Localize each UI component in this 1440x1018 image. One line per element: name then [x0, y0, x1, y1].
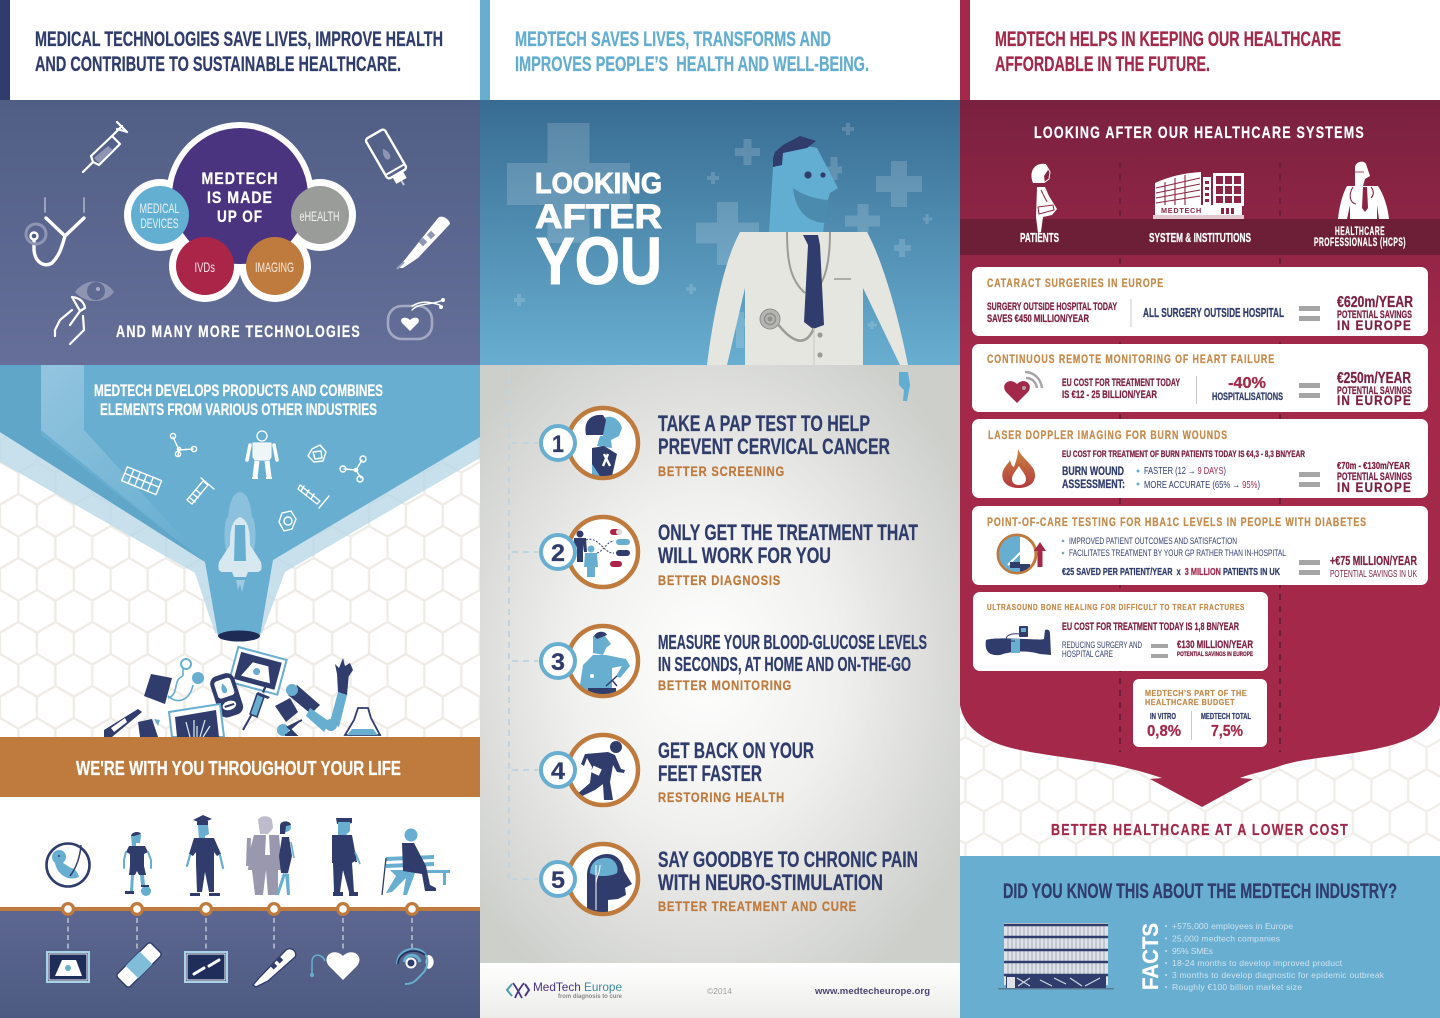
- text: copyright: ©2014: [707, 987, 733, 996]
- card: laser doppler imaging: ASSESSMENT:: [1062, 479, 1125, 491]
- title: looking after you: AFTER: [535, 198, 662, 236]
- number 1: [541, 426, 575, 460]
- card: cataract surgeries: ALL SURGERY OUTSIDE HOSPITAL: [1143, 306, 1284, 320]
- icon: broken bone x-ray: [185, 952, 227, 982]
- card: healthcare budget: MEDTECH’S PART OF THE: [1145, 688, 1247, 698]
- card: ultrasound bone healing: €130 MILLION/YEAR: [1177, 639, 1253, 651]
- figure: graduate: [187, 815, 223, 896]
- header: column 3: [960, 0, 1341, 100]
- text: step 5: BETTER TREATMENT AND CURE: [658, 899, 857, 914]
- number 3: 3: [551, 649, 565, 676]
- banner: with you throughout your life: [0, 737, 480, 797]
- card: ultrasound bone healing: ULTRASOUND BONE HEALING FOR DIFFICULT TO TREAT FRACTURES: [987, 603, 1245, 612]
- icon: heart with lead: [310, 952, 359, 980]
- logo: medtech europe: [507, 980, 623, 1000]
- card: remote monitoring: -40%: [1228, 375, 1266, 392]
- funnel mouth: [218, 630, 260, 642]
- card: cataract surgeries: [972, 267, 1428, 336]
- icon: prosthetic arm: [286, 658, 353, 732]
- icon: heart with signal: [1004, 372, 1042, 403]
- icon: thermometer: [104, 709, 142, 737]
- figure: couple: [248, 816, 294, 895]
- text: step 3: IN SECONDS, AT HOME AND ON-THE-GO: [658, 654, 911, 676]
- icon: thermometer: [253, 949, 296, 987]
- text: hcps: [1314, 226, 1406, 249]
- list: facts: 3 months to develop diagnostic for epidemic outbreak: [1172, 970, 1385, 980]
- text: step 1: BETTER SCREENING: [658, 464, 785, 479]
- band: [960, 219, 1440, 255]
- icon: doctor: [1338, 162, 1389, 219]
- text: better healthcare at lower cost: BETTER HEALTHCARE AT A LOWER COST: [1051, 822, 1349, 839]
- icon: leg with ultrasound device: [986, 626, 1051, 655]
- header: column 2: MEDTECH SAVES LIVES, TRANSFORMS AND: [515, 28, 831, 51]
- icon: hex nut: [279, 511, 296, 531]
- header: column 1: MEDICAL TECHNOLOGIES SAVE LIVES, IMPROVE HEALTH: [35, 28, 443, 51]
- life stages figures: [46, 815, 450, 896]
- figure: old man on bench: [382, 828, 450, 895]
- list: facts: +575,000 employees in Europe: [1172, 921, 1293, 931]
- header: column 2: IMPROVES PEOPLE’S HEALTH AND WELL-BEING.: [515, 53, 869, 76]
- diagram: medtech circles: IMAGING: [255, 259, 294, 275]
- list: facts: 25,000 medtech companies: [1172, 934, 1280, 944]
- card: cataract surgeries: IN EUROPE: [1337, 318, 1412, 333]
- panel: did you know: [960, 856, 1440, 1018]
- icon: x-ray: [169, 704, 224, 737]
- card: point-of-care testing: FACILITATES TREATMENT BY YOUR GP RATHER THAN IN-HOSPITAL: [1069, 548, 1286, 559]
- icon: syringe navy: [243, 682, 270, 730]
- category: system and institutions: [1149, 172, 1251, 245]
- panel: medtech is made up of: [0, 100, 480, 365]
- icon: glucose meter: [208, 671, 245, 720]
- icon: hospital building: MEDTECH: [1161, 206, 1202, 215]
- icon: microscope: [138, 719, 160, 737]
- number 3: [541, 644, 575, 678]
- text: step 4: FEET FASTER: [658, 761, 762, 786]
- header: column 1: AND CONTRIBUTE TO SUSTAINABLE HEALTHCARE.: [35, 53, 401, 76]
- text: step 3: [658, 632, 927, 693]
- text: patients: PATIENTS: [1020, 230, 1059, 245]
- icon: flask: [345, 708, 380, 735]
- figure: child: [124, 832, 151, 896]
- icon: ultrasound: [47, 952, 89, 982]
- icon: head with neuro-stimulator: [568, 844, 638, 914]
- text: step 3: BETTER MONITORING: [658, 678, 792, 693]
- step 1: [541, 408, 890, 479]
- card: remote monitoring: €250m/YEAR: [1337, 370, 1411, 387]
- icon: personalised treatment: [568, 517, 638, 587]
- icon: running man: [568, 735, 638, 805]
- text: step 1: TAKE A PAP TEST TO HELP: [658, 411, 870, 436]
- text: step 1: [658, 411, 890, 479]
- icon: robot exoskeleton: [247, 431, 277, 478]
- icon: hand testing with arrow: [998, 535, 1046, 574]
- text: system and institutions: SYSTEM & INSTITUTIONS: [1149, 230, 1251, 245]
- step 5: [541, 844, 918, 914]
- text: step 5: SAY GOODBYE TO CHRONIC PAIN: [658, 847, 918, 872]
- card: healthcare budget: HEALTHCARE BUDGET: [1145, 697, 1235, 707]
- text: hcps: HEALTHCARE: [1335, 226, 1385, 238]
- card: remote monitoring: HOSPITALISATIONS: [1212, 391, 1283, 403]
- text: step 4: [658, 738, 814, 805]
- text: step 4: RESTORING HEALTH: [658, 790, 785, 805]
- card: ultrasound bone healing: [973, 592, 1268, 671]
- icon: patient: [1031, 164, 1057, 233]
- panel: hexagon background, column 1: [0, 430, 480, 737]
- card: ultrasound bone healing: HOSPITAL CARE: [1062, 649, 1113, 660]
- text: step 2: WILL WORK FOR YOU: [658, 543, 831, 568]
- card: healthcare budget: 7,5%: [1211, 723, 1243, 740]
- card: laser doppler imaging: LASER DOPPLER IMAGING FOR BURN WOUNDS: [988, 430, 1228, 442]
- card: ultrasound bone healing: REDUCING SURGERY AND: [1062, 640, 1142, 651]
- card: laser doppler imaging: EU COST FOR TREATMENT OF BURN PATIENTS TODAY IS €4,3 - 8,3 BN/YEAR: [1062, 449, 1305, 460]
- figure: fetus: [46, 844, 90, 886]
- timeline: dashed connector: [509, 367, 538, 879]
- medical devices pile: [104, 647, 380, 737]
- number 2: 2: [551, 540, 565, 567]
- card: laser doppler imaging: [972, 419, 1428, 498]
- icon: man with glucose sensor: [568, 626, 638, 698]
- card: point-of-care testing: €25 SAVED PER PATIENT/YEAR x 3 MILLION PATIENTS IN UK: [1062, 566, 1280, 578]
- step 2: [541, 517, 918, 588]
- footer: column 2: [480, 963, 960, 1018]
- diagram: medtech circles: UP OF: [217, 207, 263, 226]
- text: medtech develops products: [94, 381, 383, 419]
- category: patients: [1020, 164, 1059, 245]
- number 1: 1: [552, 431, 564, 458]
- text: website: www.medtecheurope.org: [814, 986, 930, 997]
- list: facts: 18-24 months to develop improved product: [1172, 958, 1343, 968]
- card: ultrasound bone healing: POTENTIAL SAVINGS IN EUROPE: [1177, 651, 1253, 658]
- number 4: [541, 753, 575, 787]
- timeline dashed connectors: [68, 918, 412, 952]
- card: laser doppler imaging: FASTER (12 → 9 DAYS): [1144, 465, 1226, 477]
- diagram: medtech circles: MEDTECH: [202, 169, 278, 188]
- funnel: industries into medtech: [0, 365, 480, 642]
- title: looking after you: LOOKING: [535, 168, 662, 200]
- text: step 4: GET BACK ON YOUR: [658, 738, 814, 763]
- diagram: medtech circles: DEVICES: [140, 215, 178, 231]
- card: laser doppler imaging: IN EUROPE: [1337, 480, 1412, 495]
- icon: plaster: [116, 942, 162, 988]
- icon: ultrasound screen: [229, 647, 287, 695]
- icon: smartphone: [365, 129, 414, 191]
- text: step 2: ONLY GET THE TREATMENT THAT: [658, 520, 918, 545]
- icon: mesh stent: [122, 467, 162, 495]
- header: column 1: [0, 0, 443, 100]
- text: step 2: BETTER DIAGNOSIS: [658, 573, 781, 588]
- figure: adult: [332, 818, 360, 896]
- icon: pacemaker with heart: [388, 298, 445, 339]
- number 5: [541, 862, 575, 896]
- card: point-of-care testing: [972, 506, 1428, 585]
- number 2: [541, 535, 575, 569]
- icon: molecule left: [170, 433, 197, 457]
- text: step 5: [658, 847, 918, 914]
- card: healthcare budget: [1133, 679, 1267, 747]
- logo: medtech europe: from diagnosis to cure: [558, 994, 623, 1000]
- card: cataract surgeries: €620m/YEAR: [1337, 294, 1413, 311]
- icon: molecule right: [340, 456, 366, 482]
- icon: blood pressure cuff: [144, 659, 204, 704]
- diagram: medtech circles: IVDs: [194, 259, 215, 275]
- card: remote monitoring: CONTINUOUS REMOTE MONITORING OF HEART FAILURE: [987, 354, 1275, 366]
- icon: microscope right: [275, 698, 302, 736]
- list: facts: Roughly €100 billion market size: [1172, 982, 1302, 992]
- card: healthcare budget: IN VITRO: [1150, 711, 1176, 721]
- dashed dividers: [1120, 162, 1280, 752]
- card: remote monitoring: IS €12 - 25 BILLION/YEAR: [1062, 389, 1157, 401]
- timeline nodes: [61, 902, 419, 916]
- card: cataract surgeries: SAVES €450 MILLION/YEAR: [987, 313, 1089, 325]
- card: point-of-care testing: IMPROVED PATIENT OUTCOMES AND SATISFACTION: [1069, 536, 1237, 547]
- text: step 3: MEASURE YOUR BLOOD-GLUCOSE LEVELS: [658, 632, 927, 654]
- logo: medtech europe: MedTech Europe: [533, 980, 622, 994]
- icon: screw right: [298, 485, 329, 508]
- diagram: medtech circles: IS MADE: [207, 188, 273, 207]
- list: facts: 95% SMEs: [1172, 946, 1213, 956]
- icon: hearing aid: [397, 949, 434, 984]
- card: remote monitoring: EU COST FOR TREATMENT TODAY: [1062, 377, 1180, 389]
- doctor hand: [899, 372, 910, 401]
- icon: screw left: [187, 478, 214, 504]
- title: looking after you: YOU: [536, 224, 662, 299]
- number 4: 4: [551, 758, 566, 785]
- icon: syringe: [83, 122, 127, 172]
- card: laser doppler imaging: €70m - €130m/YEAR: [1337, 461, 1411, 472]
- card: healthcare budget: MEDTECH TOTAL: [1201, 711, 1251, 721]
- hexagon background, column 3: [960, 705, 1440, 856]
- panel: timeline lower: [0, 902, 480, 1018]
- icon: nut top: [308, 445, 326, 462]
- text: and many more technologies: AND MANY MORE TECHNOLOGIES: [116, 322, 361, 341]
- card: laser doppler imaging: MORE ACCURATE (65% → 95%): [1144, 479, 1260, 491]
- text: step 5: WITH NEURO-STIMULATION: [658, 870, 883, 895]
- icon: office building: [998, 923, 1114, 990]
- background crosses: [507, 123, 932, 348]
- card: remote monitoring: [972, 344, 1428, 412]
- icon: space shuttle: [218, 492, 262, 592]
- diagram: medtech circles: [124, 122, 356, 302]
- step 4: [541, 735, 814, 805]
- card: cataract surgeries: SURGERY OUTSIDE HOSPITAL TODAY: [987, 301, 1117, 313]
- diagram: medtech circles: MEDICAL: [140, 200, 180, 216]
- panel: healthcare systems with arrow: [960, 100, 1440, 807]
- text: medtech develops products: ELEMENTS FROM VARIOUS OTHER INDUSTRIES: [100, 400, 377, 419]
- panel: looking after you: [480, 100, 960, 365]
- text: facts: FACTS: [1138, 923, 1163, 990]
- card: laser doppler imaging: BURN WOUND: [1062, 466, 1124, 478]
- number 5: 5: [551, 867, 565, 894]
- card: ultrasound bone healing: EU COST FOR TREATMENT TODAY IS 1,8 BN/YEAR: [1062, 621, 1239, 633]
- icon: woman with ribbon: [568, 408, 638, 478]
- card: healthcare budget: 0,8%: [1147, 723, 1181, 740]
- banner: with you throughout your life: WE'RE WITH YOU THROUGHOUT YOUR LIFE: [76, 758, 401, 780]
- diagram: medtech circles: eHEALTH: [300, 208, 340, 224]
- icon: stethoscope: [26, 198, 84, 265]
- title: looking after you: [535, 168, 662, 299]
- header: column 3: AFFORDABLE IN THE FUTURE.: [995, 53, 1210, 76]
- header: column 2: [480, 0, 869, 100]
- card: cataract surgeries: CATARACT SURGERIES IN EUROPE: [987, 278, 1164, 290]
- step 3: [541, 626, 927, 698]
- text: step 2: [658, 520, 918, 588]
- text: medtech develops products: MEDTECH DEVELOPS PRODUCTS AND COMBINES: [94, 381, 383, 400]
- category: healthcare professionals: [1314, 162, 1406, 249]
- panel: steps background: [480, 365, 960, 963]
- figure: doctor: [707, 136, 908, 365]
- card: remote monitoring: IN EUROPE: [1337, 393, 1412, 408]
- icon: digital thermometer: [397, 217, 450, 269]
- icon: eye and contact lens finger: [55, 282, 114, 344]
- icon: flame: [1002, 449, 1035, 488]
- list: facts: [1165, 921, 1385, 992]
- text: step 1: PREVENT CERVICAL CANCER: [658, 434, 890, 459]
